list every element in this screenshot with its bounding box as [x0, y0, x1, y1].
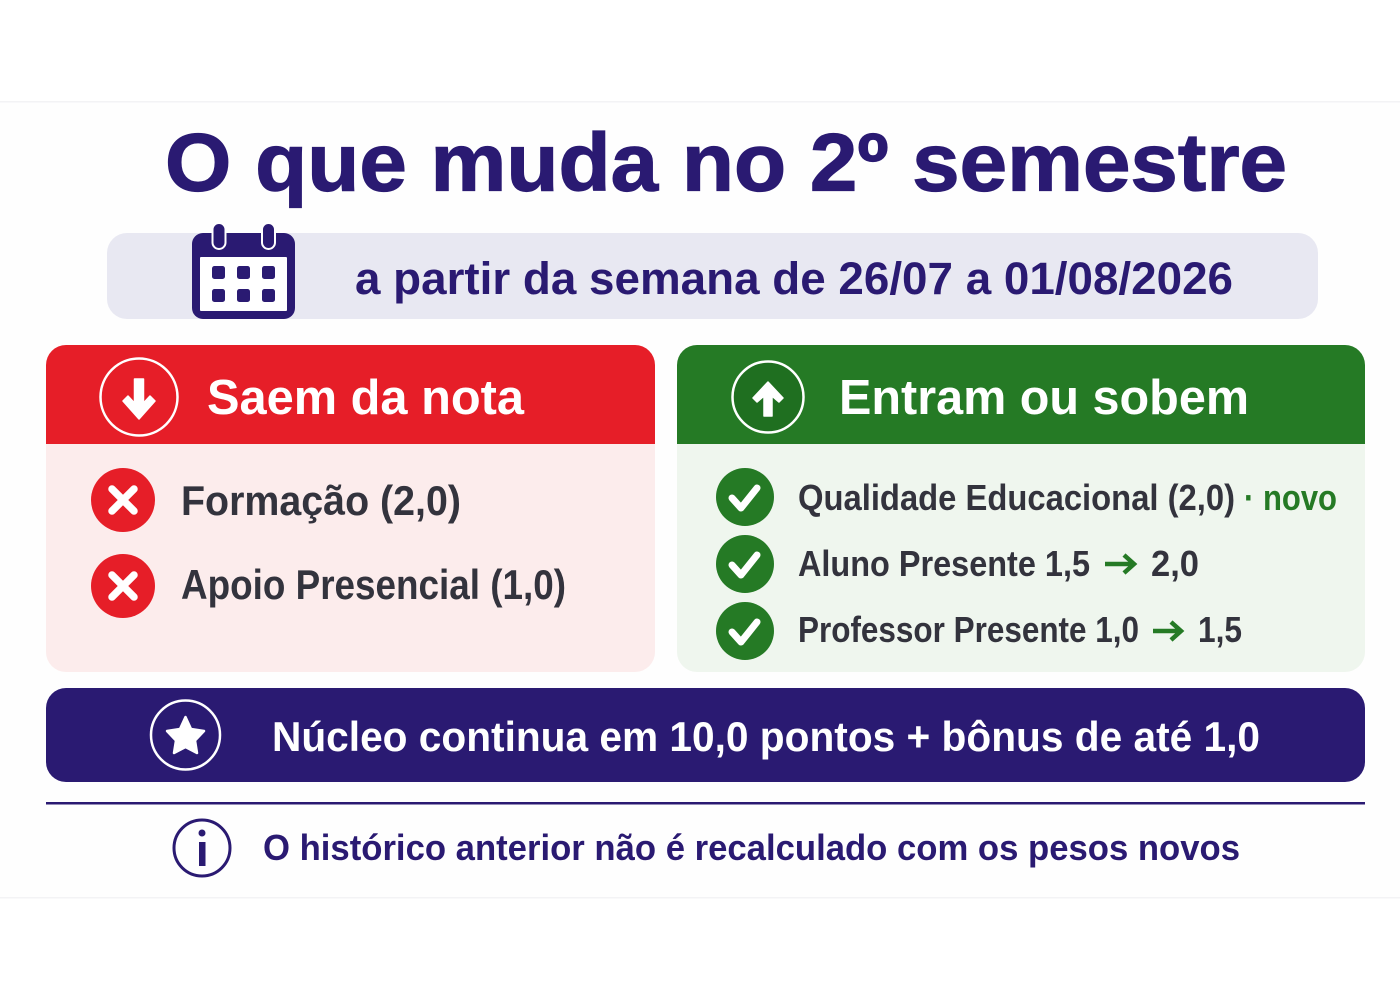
- icon: calendar: [192, 223, 295, 319]
- footnote text: O histórico anterior não é recalculado com os pesos novos: [263, 827, 1240, 868]
- icon: info: [174, 820, 230, 876]
- panel: saem da nota: [46, 345, 655, 672]
- banner: núcleo: [46, 688, 1365, 782]
- item: formação: Formação (2,0): [181, 477, 461, 524]
- item: aluno presente: 2,0: [1151, 543, 1199, 584]
- item: professor presente: [716, 602, 1242, 660]
- heading: entram ou sobem: Entram ou sobem: [839, 371, 1249, 425]
- icon: star: [151, 700, 220, 770]
- item: aluno presente: [716, 535, 1199, 593]
- item: qualidade educacional: · novo: [1244, 477, 1337, 518]
- footnote: [174, 820, 1240, 876]
- item: apoio presencial: [91, 554, 566, 618]
- icon: up arrow: [732, 362, 804, 432]
- title: O que muda no 2º semestre: [165, 118, 1287, 208]
- item: qualidade educacional: Qualidade Educacional (2,0): [798, 477, 1235, 518]
- banner text: Núcleo continua em 10,0 pontos + bônus de até 1,0: [272, 713, 1260, 760]
- item: aluno presente: Aluno Presente 1,5: [798, 543, 1090, 584]
- item: apoio presencial: Apoio Presencial (1,0): [181, 561, 566, 608]
- date banner: [107, 223, 1318, 319]
- panel: entram ou sobem: [677, 345, 1365, 672]
- item: professor presente: Professor Presente 1,0: [798, 609, 1139, 650]
- icon: down arrow: [100, 358, 178, 436]
- item: professor presente: 1,5: [1198, 609, 1242, 650]
- item: formação: [91, 468, 461, 532]
- item: qualidade educacional: [716, 468, 1337, 526]
- date text: a partir da semana de 26/07 a 01/08/2026: [355, 253, 1233, 304]
- heading: saem da nota: Saem da nota: [207, 371, 525, 425]
